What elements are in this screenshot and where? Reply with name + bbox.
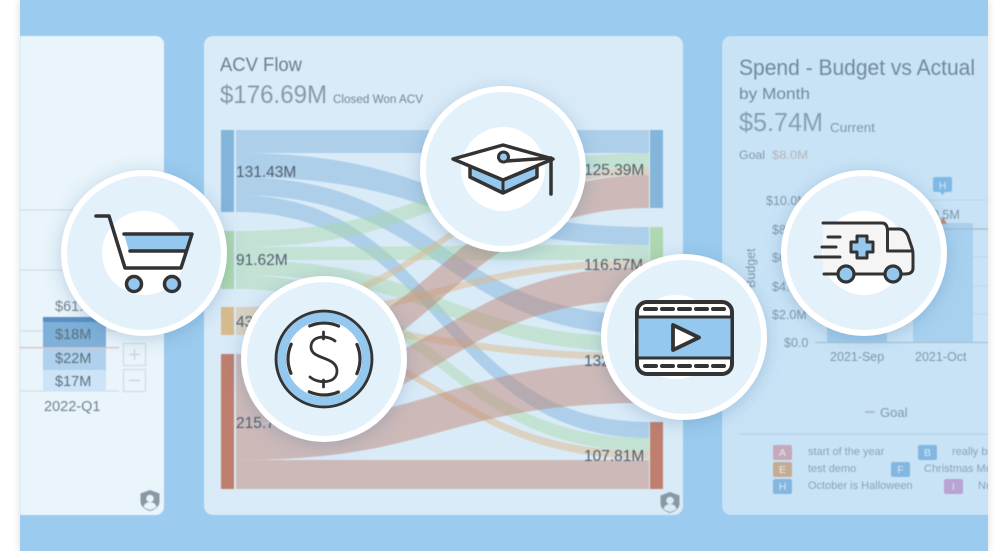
sankey labels: 107.81M [584,448,644,465]
stacked bar: $61. [55,299,83,315]
chart legend [864,407,908,418]
axis label: 2022-Q1 [44,399,100,415]
marker H: H [939,180,946,192]
bar chart: 9.5M [932,208,960,222]
metric: Goal [739,148,765,162]
bar chart: $8.0M [772,223,807,237]
icon badge: graduation cap [423,89,583,249]
annotation legend: B [924,447,931,459]
icon badge: dollar coin [244,279,404,439]
bar chart: Budget [744,248,758,288]
annotation legend: I [952,481,955,493]
annotation legend [773,445,1007,494]
sankey labels: 116.57M [584,257,643,274]
annotation legend: H [779,481,786,493]
heading: Spend - Budget vs Actual [739,55,975,80]
bar chart: $10.0M [766,194,808,208]
heading: by Month [739,86,810,103]
sankey nodes [221,130,663,489]
sankey chart [221,130,663,489]
sankey labels: 131.43M [236,164,296,181]
panel: ACV Flow [204,36,683,515]
annotation legend: October is Halloween [808,480,913,492]
icon badge: shopping cart [64,173,224,333]
icon badge: video player [604,257,764,417]
sankey labels: 43 [236,314,253,331]
sankey labels: 91.62M [236,252,288,269]
bar chart: $6.0M [772,251,807,265]
metric: Current [830,120,875,135]
stacked bar: $17M [55,374,91,390]
panel: Spend budget vs actual [722,36,1008,515]
bar chart [744,177,988,364]
stacked bar: $18M [55,327,91,343]
icon: shield [140,490,160,511]
annotation legend: really bad [952,446,1000,458]
stacked bar: $22M [55,351,91,367]
annotation legend: F [897,464,904,476]
panel: left chart [20,36,164,515]
annotation legend: E [779,464,786,476]
sankey labels [236,162,644,465]
annotation legend: Christmas Month [924,463,1007,475]
bar chart: 2021-Oct [915,350,967,364]
marker H [933,177,952,195]
sankey labels: 132 [584,353,610,370]
heading: ACV Flow [220,54,303,76]
heading [739,55,975,103]
sankey labels: 215.7 [236,415,275,432]
annotation legend: start of the year [808,446,885,458]
icon badge: ambulance [784,173,944,333]
metric [739,107,875,162]
chart legend: Goal [880,405,908,420]
icon: shield [660,492,680,513]
annotation legend: test demo [808,463,856,475]
zoom controls [124,344,146,392]
bar chart: $2.0M [772,308,807,322]
bar chart: $4.0M [772,280,807,294]
metric: $8.0M [772,148,808,162]
metric: Closed Won ACV [333,94,423,106]
metric [220,81,423,109]
sankey labels: 125.39M [584,162,644,179]
metric: $176.69M [220,81,327,109]
bar chart: $0.0 [784,336,808,350]
annotation legend: A [779,447,786,459]
bar chart: 2021-Sep [830,350,884,364]
stacked bar [43,299,106,391]
annotation legend: Nu [978,480,992,492]
metric: $5.74M [739,107,823,137]
